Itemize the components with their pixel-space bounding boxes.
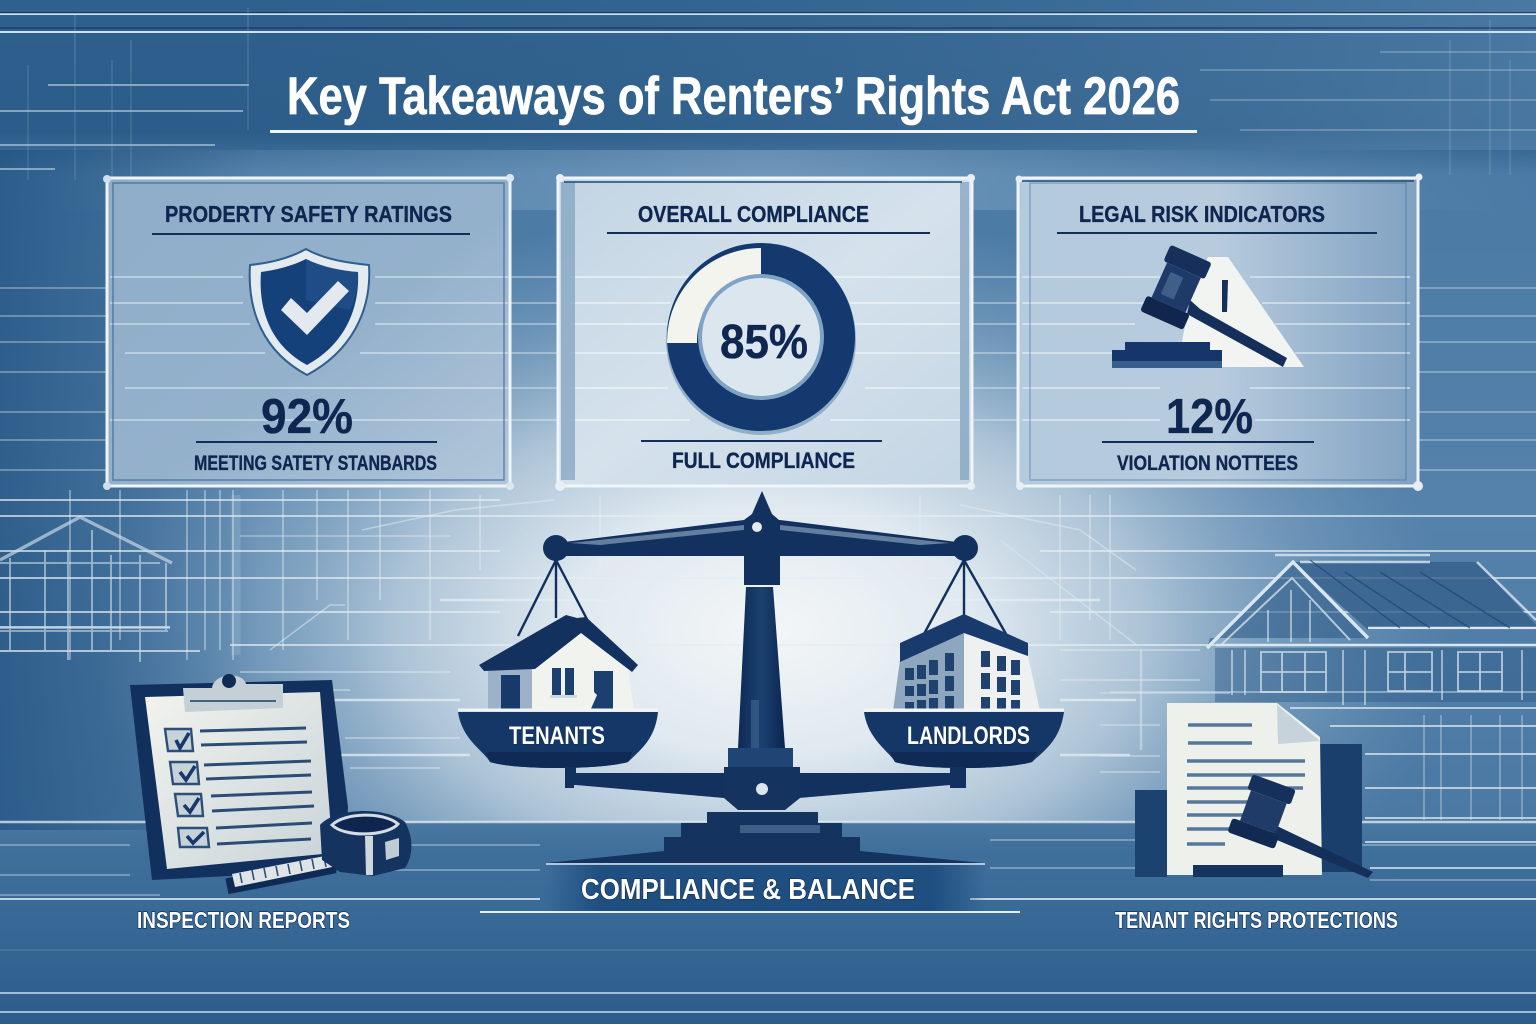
scale base bbox=[546, 812, 983, 863]
scale beam bbox=[556, 520, 965, 560]
title underline bbox=[270, 130, 1197, 133]
icon: shield with check bbox=[250, 249, 369, 375]
stat label: FULL COMPLIANCE bbox=[672, 448, 855, 473]
stat: 92%: 92% bbox=[261, 390, 353, 444]
pan label: landlords: LANDLORDS bbox=[907, 722, 1030, 750]
building on right pan bbox=[893, 614, 1040, 711]
caption: compliance and balance: COMPLIANCE & BALANCE bbox=[581, 874, 915, 906]
right pan bbox=[864, 710, 1064, 768]
panel: legal risk indicators bbox=[1016, 174, 1423, 491]
tape measure bbox=[225, 857, 336, 894]
caption: tenant rights protections: TENANT RIGHTS PROTECTIONS bbox=[1115, 907, 1398, 933]
panel: overall compliance bbox=[555, 174, 975, 491]
lower beam bbox=[565, 767, 724, 798]
compliance band bbox=[480, 864, 1020, 912]
stat label: MEETING SATETY STANBARDS bbox=[194, 452, 437, 475]
caption: inspection reports: INSPECTION REPORTS bbox=[137, 907, 350, 933]
stat: 12%: 12% bbox=[1166, 390, 1253, 444]
donut value: 85% bbox=[720, 316, 808, 369]
checklist lines bbox=[200, 728, 314, 844]
house on left pan bbox=[479, 615, 638, 711]
title text: Key Takeaways of Renters’ Rights Act 2026 bbox=[287, 67, 1180, 126]
scale centre and column bbox=[744, 491, 779, 560]
pan label: tenants: TENANTS bbox=[509, 722, 605, 750]
panel heading: OVERALL COMPLIANCE bbox=[638, 201, 869, 227]
icon: balance scale bbox=[458, 491, 1064, 863]
blueprint house sketch: left bbox=[0, 517, 172, 662]
panel heading: PRODERTY SAFETY RATINGS bbox=[165, 201, 452, 227]
checklist checkboxes bbox=[165, 729, 209, 847]
blueprint house sketch: right bbox=[1000, 540, 1536, 868]
panel: property safety ratings bbox=[103, 174, 514, 490]
scale hanging strings bbox=[518, 560, 1006, 636]
left pan bbox=[458, 710, 658, 768]
panel heading: LEGAL RISK INDICATORS bbox=[1079, 201, 1325, 227]
icon: clipboard with checklist bbox=[130, 674, 411, 894]
icon: warning triangle with gavel bbox=[1112, 244, 1304, 368]
stat label: VIOLATION NOTTEES bbox=[1117, 452, 1298, 475]
donut chart: 85% bbox=[666, 243, 856, 435]
icon: legal document with gavel bbox=[1135, 703, 1373, 878]
